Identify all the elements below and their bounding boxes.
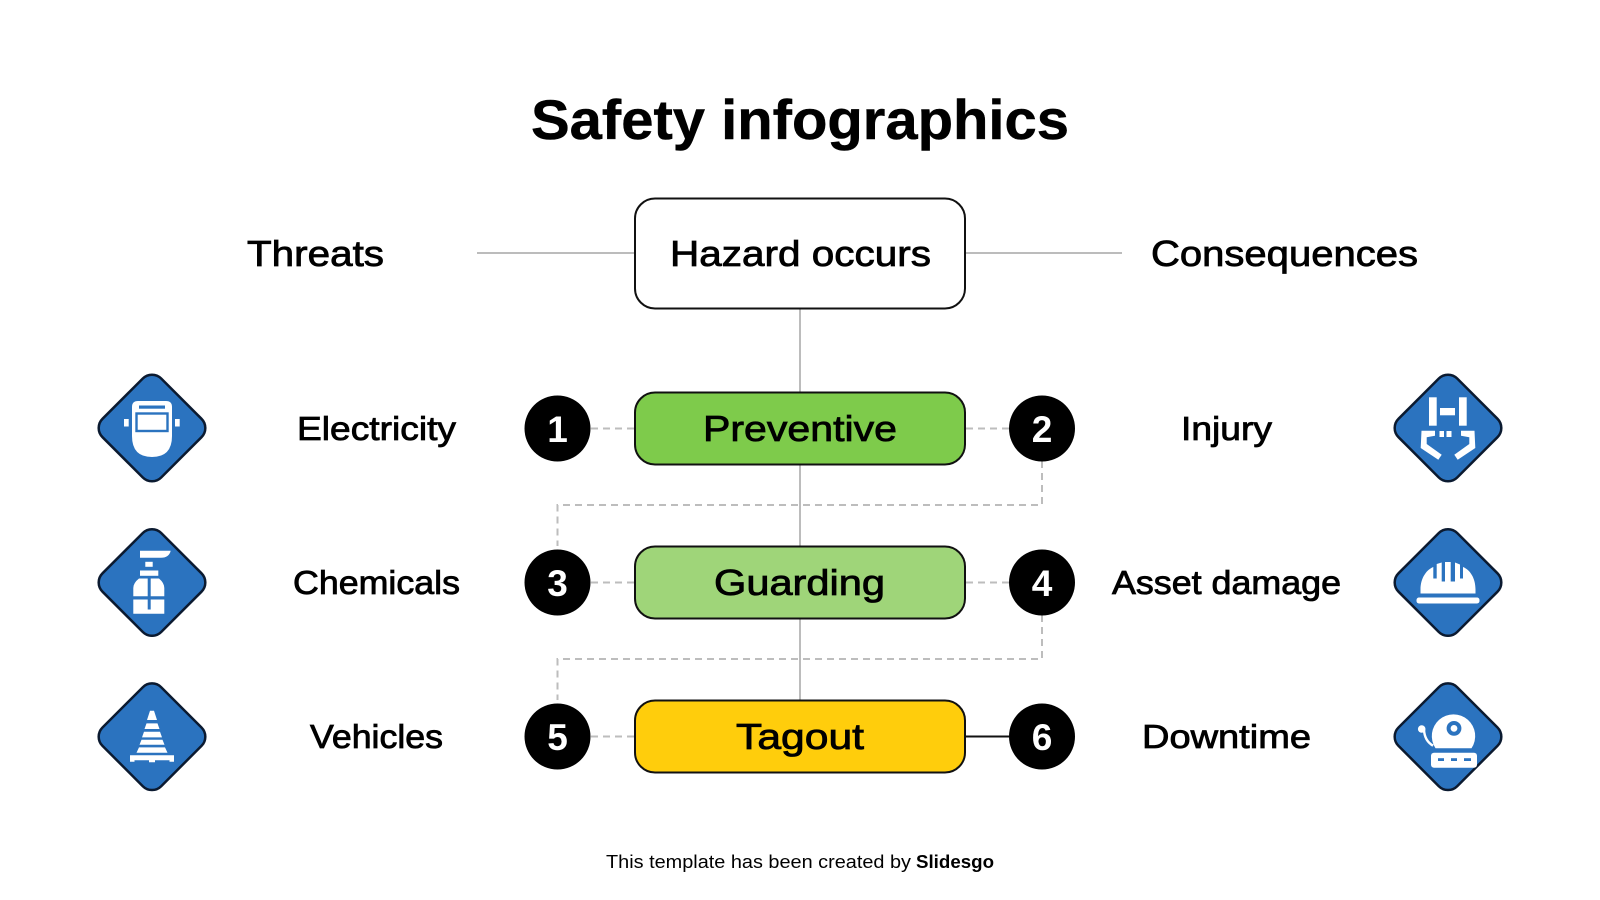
number badge 6: 6 (1032, 717, 1052, 758)
footer credit: This template has been created by (606, 852, 911, 872)
box: preventive (635, 392, 965, 464)
box: tagout: Tagout (736, 716, 864, 757)
number badge 3: 3 (547, 563, 568, 604)
box: guarding: Guarding (714, 562, 885, 603)
box: guarding (635, 546, 965, 618)
label: electricity: Electricity (297, 410, 457, 447)
title: Safety infographics (531, 88, 1069, 151)
number badge 1 (524, 396, 590, 462)
label: vehicles: Vehicles (310, 718, 443, 755)
heading: threats: Threats (247, 233, 384, 274)
icon: chemical bottle (93, 524, 211, 641)
box: hazard occurs: Hazard occurs (670, 233, 931, 274)
number badge 5 (524, 704, 590, 770)
icon: traffic cone (93, 678, 211, 795)
icon: hard hat (1389, 524, 1507, 641)
label: chemicals: Chemicals (293, 564, 460, 601)
label: injury: Injury (1181, 410, 1273, 447)
number badge 4: 4 (1032, 563, 1053, 604)
number badge 1: 1 (547, 409, 568, 450)
number badge 2: 2 (1032, 409, 1052, 450)
heading: consequences: Consequences (1151, 233, 1418, 274)
number badge 2 (1009, 396, 1075, 462)
icon: alarm bell (1389, 678, 1507, 795)
box: tagout (635, 700, 965, 772)
icon: safety harness (1389, 369, 1507, 487)
icon: welding mask (93, 369, 211, 487)
box: hazard occurs (635, 198, 965, 308)
number badge 5: 5 (547, 717, 568, 758)
footer credit: Slidesgo (916, 852, 994, 872)
box: preventive: Preventive (703, 408, 897, 449)
label: downtime: Downtime (1142, 718, 1311, 755)
number badge 3 (524, 550, 590, 616)
label: asset damage: Asset damage (1112, 564, 1341, 601)
number badge 6 (1009, 704, 1075, 770)
connector lines (477, 253, 1122, 736)
number badge 4 (1009, 550, 1075, 616)
